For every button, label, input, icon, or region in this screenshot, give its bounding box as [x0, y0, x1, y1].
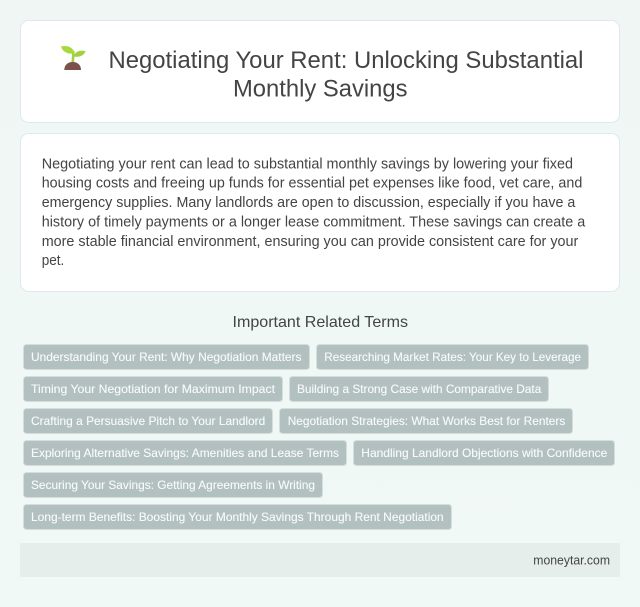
tag: understanding your rent: Understanding Your Rent: Why Negotiation Matters — [31, 350, 302, 364]
panel: title card — [20, 20, 620, 122]
text block: description: more stable financial environment, ensuring you can provide consistent care for your — [42, 234, 578, 250]
text block: description: emergency supplies. Many landlords are open to discussion, especially if you have a — [42, 195, 576, 211]
tag: handling landlord objections: Handling Landlord Objections with Confidence — [361, 446, 608, 460]
tag: negotiation strategies: Negotiation Strategies: What Works Best for Renters — [288, 414, 565, 428]
text block: description: pet. — [42, 253, 64, 269]
tag: exploring alternative savings — [24, 440, 346, 466]
text block: description: history of timely payments or a longer lease commitment. These savings can create a — [42, 214, 586, 230]
tag: negotiation strategies — [280, 408, 572, 434]
tag: building a strong case — [290, 376, 548, 402]
title — [108, 47, 584, 102]
title: Negotiating Your Rent: Unlocking Substantial — [108, 47, 584, 74]
tag: researching market rates — [316, 344, 588, 370]
title: Monthly Savings — [233, 76, 408, 102]
text block: description: Negotiating your rent can lead to substantial monthly savings by lowering your fixed — [42, 156, 573, 172]
heading: related terms: Important Related Terms — [232, 314, 408, 331]
tag: securing your savings: Securing Your Savings: Getting Agreements in Writing — [31, 478, 315, 492]
footer source text: moneytar.com — [533, 552, 610, 568]
tag: understanding your rent — [24, 344, 310, 370]
footer — [20, 543, 620, 577]
icon: sprout — [61, 46, 86, 70]
text block: description — [42, 156, 586, 269]
tag: timing your negotiation: Timing Your Negotiation for Maximum Impact — [31, 382, 276, 396]
tag: researching market rates: Researching Market Rates: Your Key to Leverage — [324, 350, 581, 364]
tag: securing your savings — [24, 472, 322, 498]
tag group: related terms — [24, 344, 614, 530]
tag: building a strong case: Building a Strong Case with Comparative Data — [297, 382, 542, 396]
tag: long-term benefits — [24, 504, 452, 530]
tag: timing your negotiation — [24, 376, 282, 402]
panel: description — [20, 134, 620, 292]
tag: crafting a persuasive pitch: Crafting a Persuasive Pitch to Your Landlord — [31, 414, 265, 428]
tag: crafting a persuasive pitch — [24, 408, 272, 434]
text block: description: housing costs and freeing up funds for essential pet expenses like food, vet care, and — [42, 176, 582, 192]
tag: long-term benefits: Long-term Benefits: Boosting Your Monthly Savings Through Rent Negotiation — [31, 510, 444, 524]
tag: exploring alternative savings: Exploring Alternative Savings: Amenities and Lease Terms — [31, 446, 339, 460]
tag: handling landlord objections — [354, 440, 614, 466]
